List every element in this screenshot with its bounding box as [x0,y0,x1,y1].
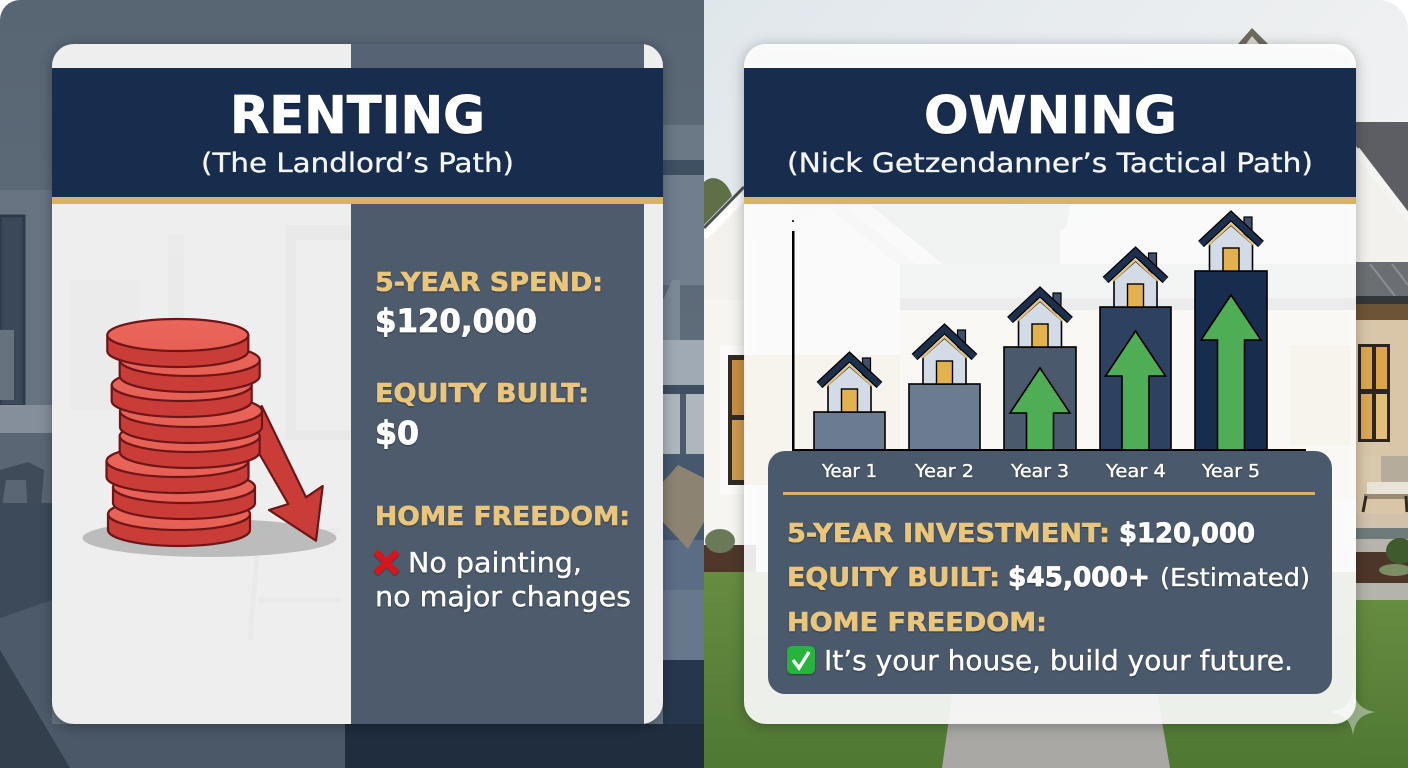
panel: renting [52,44,663,724]
title: OWNING: OWNING [924,86,1177,146]
icon: red cross [376,552,397,573]
text: it's your house: It’s your house, build your future. [824,644,1293,677]
background: new-build farmhouse exterior [704,0,1408,768]
bar: year 3 [1004,292,1076,450]
note: estimated: (Estimated) [1160,563,1310,592]
sofa cushion [663,465,704,549]
value: investment $120,000: $120,000 [1119,518,1255,549]
label: home freedom: HOME FREEDOM: [375,502,630,532]
label: home freedom: HOME FREEDOM: [787,608,1047,638]
stats: renting [375,268,631,613]
card body: owning [744,44,1356,724]
label: 5-year spend: 5-YEAR SPEND: [375,268,603,298]
text: no major changes: no major changes [375,580,631,613]
axis label: year 5: Year 5 [1201,461,1260,482]
bar: year 4 [1100,252,1171,450]
card body: renting [52,44,663,724]
value: $45,000+: $45,000+ [1008,562,1150,593]
faint window ghost in renting card [70,225,351,640]
icon: porch chair [1363,456,1408,512]
ghost porch and gable behind owning card [745,225,1356,485]
chart: five year equity growth [792,216,1306,452]
header: renting [52,68,663,204]
illustration: red coin stack with falling arrow [82,319,336,557]
bar: year 1 [814,357,885,450]
label: equity built: EQUITY BUILT: [375,379,589,409]
title: RENTING: RENTING [230,86,485,146]
value: $0: $0 [375,414,419,452]
axis label: year 4: Year 4 [1105,461,1166,482]
subtitle: the landlord's path: (The Landlord’s Path) [201,148,514,179]
label: 5-year investment: 5-YEAR INVESTMENT: [787,519,1110,549]
panel: owning [744,44,1356,724]
text: no painting: No painting, [408,546,582,579]
icon: sparkle mark [1328,687,1376,735]
axis label: year 3: Year 3 [1010,461,1069,482]
axis label: year 1: Year 1 [821,461,877,482]
header: owning [744,68,1356,204]
axis label: year 2: Year 2 [914,461,974,482]
background: rental apartment interior [0,0,704,768]
subtitle: tactical path: (Nick Getzendanner’s Tactical Path) [787,148,1313,179]
label: equity built: EQUITY BUILT: [787,563,1000,593]
icon: green check [787,646,815,674]
bar: year 2 [909,329,980,450]
value: $120,000: $120,000 [375,302,537,340]
data column background [351,44,644,724]
bar: year 5 [1195,216,1267,450]
panel: owning stats [768,451,1332,694]
